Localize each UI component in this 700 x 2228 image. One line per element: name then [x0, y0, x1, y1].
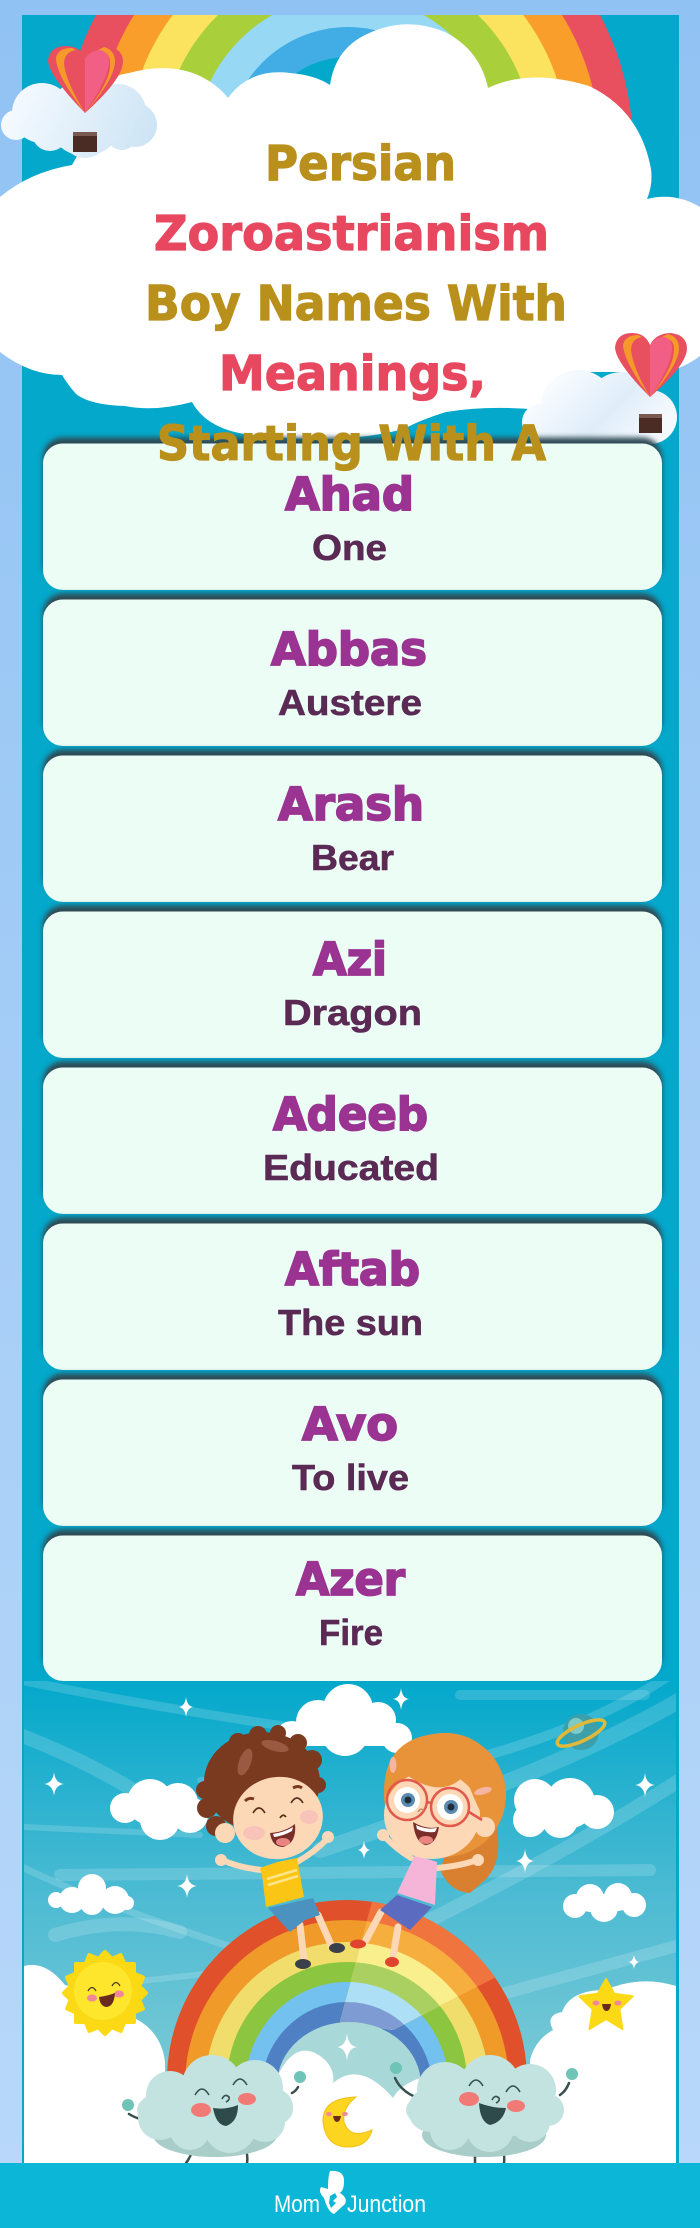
- right small cloud: [522, 370, 677, 448]
- girl face: [475, 1817, 495, 1837]
- girl shoes: [350, 1940, 399, 1967]
- sparkles: [44, 1688, 655, 1969]
- title: [145, 136, 567, 472]
- footer band: [0, 2163, 700, 2228]
- white cloud banks: [24, 1965, 676, 2163]
- card 5: Adeeb: [43, 1068, 662, 1214]
- icon: planet: [554, 1714, 608, 1751]
- icon: sun: [61, 1949, 149, 2037]
- boy shorts: [268, 1898, 320, 1932]
- logo: MomJunction: [274, 2171, 426, 2218]
- sky clouds: [48, 1684, 646, 1922]
- name: Avo: [302, 1398, 398, 1451]
- icon: right heart balloon: [615, 333, 687, 433]
- boy face: [215, 1823, 235, 1843]
- name: Arash: [278, 778, 424, 831]
- meaning: Fire: [319, 1612, 383, 1653]
- boy arms and legs: [222, 1838, 332, 1960]
- sky streaks: [20, 1668, 680, 2000]
- boy hair: [196, 1725, 326, 1836]
- girl skirt: [380, 1895, 432, 1930]
- card 3: Arash: [43, 756, 662, 902]
- meaning: Austere: [278, 682, 422, 723]
- meaning: Educated: [263, 1147, 439, 1188]
- rainbow highlight wedge: [340, 1902, 495, 2030]
- big title cloud: [0, 24, 700, 439]
- girl glasses and eyes: [394, 1787, 420, 1813]
- girl shirt: [397, 1855, 437, 1905]
- logo: MomJunction: Mom: [274, 2191, 320, 2218]
- title: Boy Names With: [145, 276, 567, 332]
- meaning: Bear: [311, 837, 394, 878]
- right smiling cloud: [390, 2055, 578, 2163]
- left smiling cloud: [122, 2055, 306, 2163]
- boy shoes: [295, 1943, 345, 1969]
- left small cloud: [1, 80, 157, 158]
- girl hair back: [440, 1828, 498, 1893]
- girl fringe: [384, 1733, 506, 1815]
- card 2: Abbas: [43, 600, 662, 746]
- white ground and centre lobes: [160, 2051, 532, 2163]
- icon: moon: [323, 2097, 372, 2147]
- illustration: sky scene: [24, 1681, 676, 2163]
- girl: [350, 1733, 506, 1967]
- name: Adeeb: [273, 1088, 428, 1141]
- sky: [24, 1705, 676, 2072]
- card 6: Aftab: [43, 1224, 662, 1370]
- card 1: Ahad: [43, 444, 662, 590]
- girl mouth: [413, 1822, 439, 1845]
- card 4: Azi: [43, 912, 662, 1058]
- name: Aftab: [285, 1243, 420, 1296]
- boy shirt: [260, 1858, 304, 1907]
- title: Meanings,: [219, 346, 486, 402]
- meaning: Dragon: [283, 992, 422, 1033]
- card 8: Azer: [43, 1536, 662, 1681]
- meaning: To live: [292, 1457, 409, 1498]
- icon: mother and child: [320, 2171, 346, 2214]
- bottom rainbow: [167, 1900, 526, 2098]
- icon: left heart balloon: [48, 46, 123, 152]
- boy: [196, 1725, 345, 1969]
- icon: star: [579, 1979, 633, 2029]
- title: Starting With A: [157, 416, 546, 472]
- name: Azi: [313, 933, 387, 986]
- name: Abbas: [271, 623, 427, 676]
- logo: MomJunction: Junction: [347, 2191, 426, 2218]
- girl arms and legs: [366, 1836, 477, 1957]
- name: Azer: [296, 1553, 406, 1606]
- top rainbow: [80, 15, 632, 122]
- card 7: Avo: [43, 1380, 662, 1526]
- title: Persian: [265, 136, 456, 192]
- name: Ahad: [285, 468, 414, 521]
- title: Zoroastrianism: [154, 206, 549, 262]
- sparkle under rainbow: [337, 2033, 357, 2061]
- meaning: The sun: [278, 1302, 423, 1343]
- meaning: One: [312, 527, 387, 568]
